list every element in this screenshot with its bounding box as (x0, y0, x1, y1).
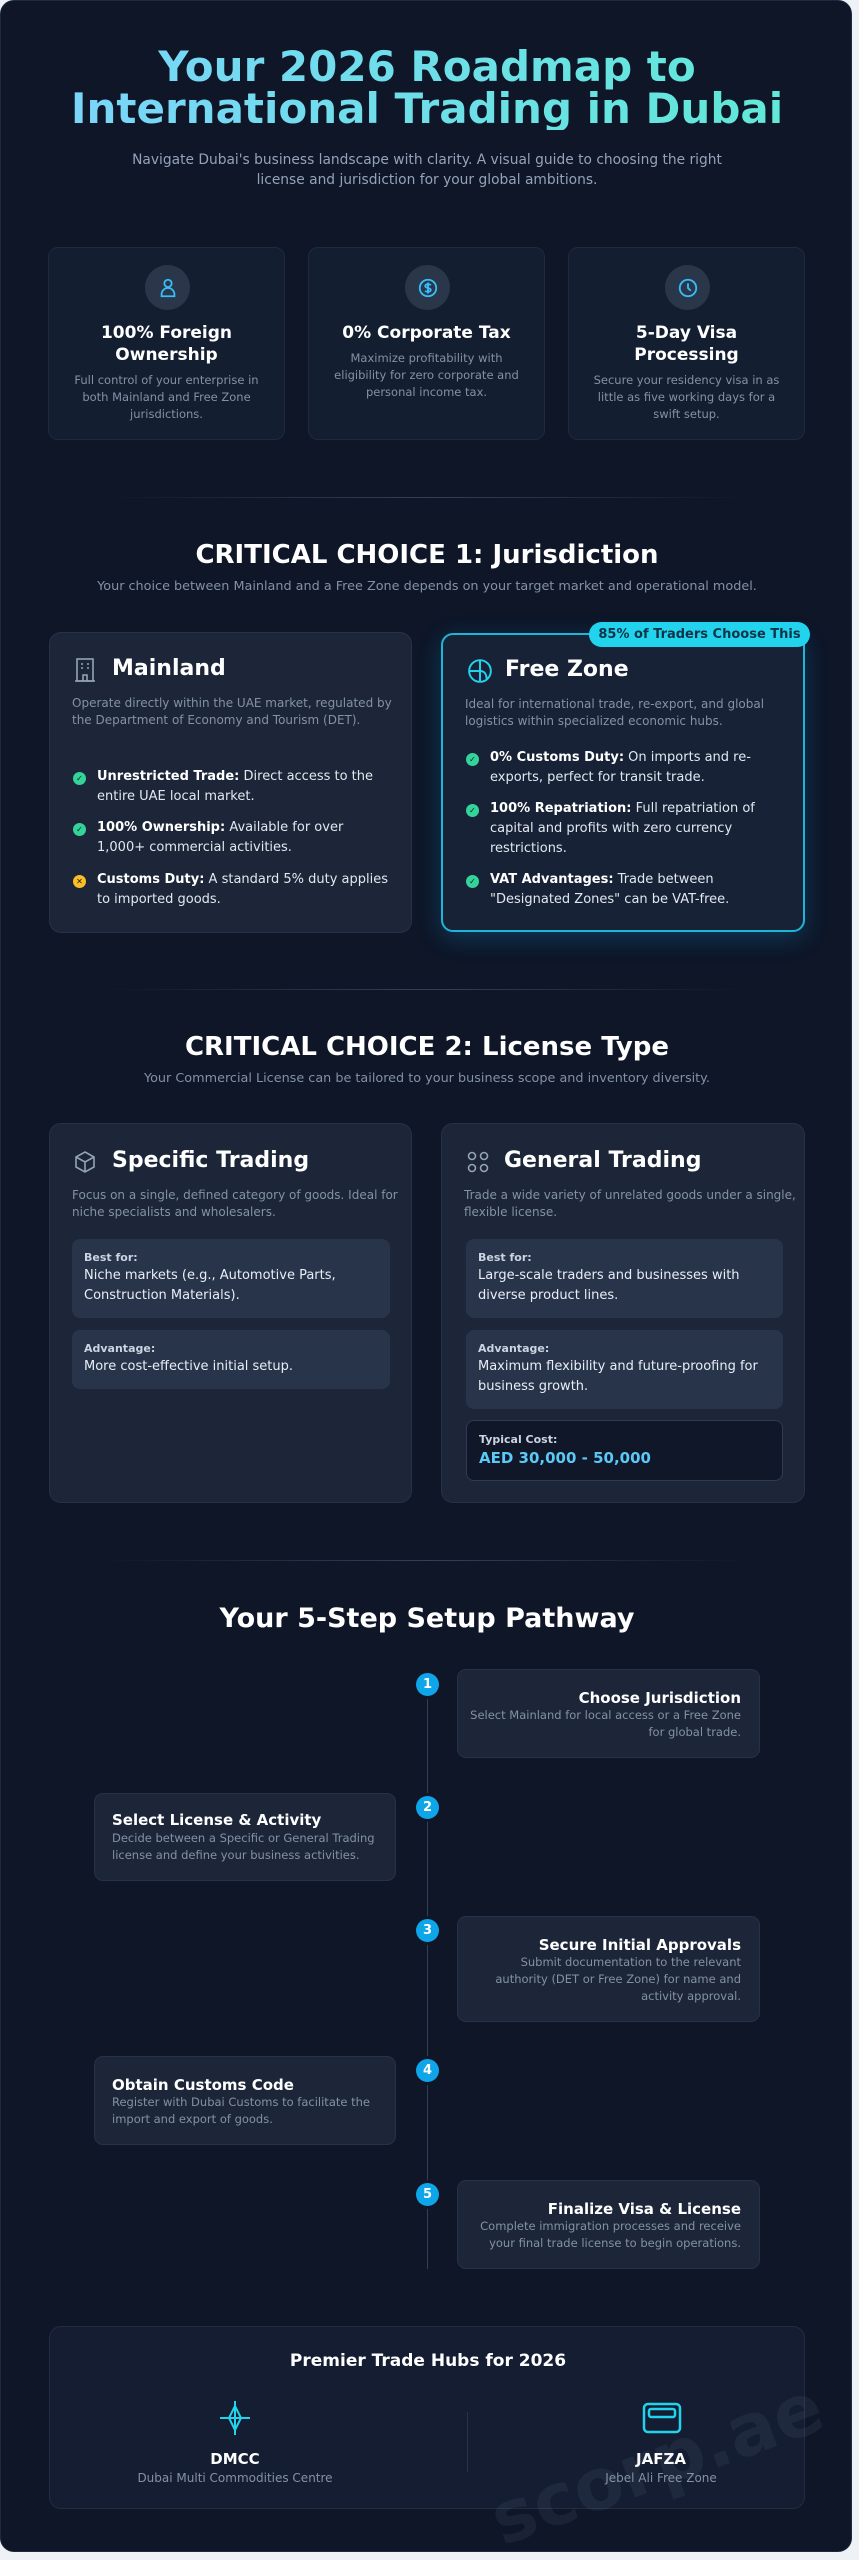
heading: choice 2: CRITICAL CHOICE 2: License Type (185, 1032, 669, 1062)
heading: Premier Trade Hubs for 2026 (290, 2351, 566, 2371)
panel: free zone (441, 633, 805, 932)
hub: DMCC (137, 2401, 333, 2485)
step 2 (94, 1793, 396, 1881)
heading (634, 323, 739, 365)
box: typical cost: AED 30,000 - 50,000 (479, 1449, 651, 1467)
text: Focus on a single, defined category of goods. Ideal for niche specialists and wholesalers. (72, 1188, 398, 1219)
panel: free zone: 0% Customs Duty: On imports and re-exports, perfect for transit trade. (490, 750, 751, 785)
timeline (427, 1699, 428, 2269)
panel: free zone: ✓ (469, 806, 476, 815)
subheading: Your Commercial License can be tailored to your business scope and inventory diversity. (144, 1071, 710, 1086)
icon: building (75, 658, 95, 682)
badge (589, 622, 810, 647)
panel: free zone: ✓ (469, 755, 476, 764)
step 5: Finalize Visa & License (548, 2200, 741, 2218)
panel: mainland (49, 632, 412, 933)
heading: Mainland (112, 656, 226, 681)
list (466, 750, 756, 907)
title: Your 2026 Roadmap to (158, 42, 696, 91)
heading (101, 323, 232, 365)
marker 4 (416, 2059, 439, 2082)
hub: JAFZA (604, 2402, 717, 2485)
panel: specific trading (49, 1123, 412, 1503)
heading: 100% Foreign (101, 323, 232, 343)
panel: free zone: 100% Repatriation: Full repatriation of capital and profits with zero currency restrictions. (490, 801, 755, 856)
heading: 0% Corporate Tax (342, 323, 511, 343)
marker 1: 1 (423, 1677, 432, 1692)
feature card: visa (568, 247, 805, 440)
step 2: Decide between a Specific or General Trading license and define your business activities. (112, 1831, 375, 1862)
list (73, 769, 388, 907)
step 3: Secure Initial Approvals (539, 1936, 741, 1954)
text: Secure your residency visa in as little as five working days for a swift setup. (594, 373, 779, 421)
step 1: Select Mainland for local access or a Free Zone for global trade. (470, 1708, 741, 1739)
heading: 5-Day Visa (636, 323, 737, 343)
marker 5: 5 (423, 2187, 432, 2202)
panel: mainland: ✓ (76, 774, 83, 783)
panel: trade hubs (49, 2326, 805, 2509)
panel: mainland: ✕ (76, 877, 83, 886)
marker 3 (416, 1919, 439, 1942)
heading: pathway: Your 5-Step Setup Pathway (220, 1603, 634, 1634)
step 2: Select License & Activity (112, 1811, 321, 1829)
icon: person (145, 265, 190, 310)
box: advantage: Maximum flexibility and future-proofing for business growth. (478, 1359, 758, 1394)
text: Maximize profitability with eligibility for zero corporate and personal income tax. (334, 351, 519, 399)
hub: JAFZA: Jebel Ali Free Zone (605, 2471, 717, 2485)
marker 4: 4 (423, 2063, 432, 2078)
box: best for: Large-scale traders and businesses with diverse product lines. (478, 1268, 740, 1303)
heading: choice 1: CRITICAL CHOICE 1: Jurisdiction (195, 540, 659, 570)
text: Trade a wide variety of unrelated goods under a single, flexible license. (464, 1188, 796, 1219)
feature card: tax (308, 247, 545, 440)
step 4: Register with Dubai Customs to facilitate the import and export of goods. (112, 2095, 370, 2126)
box: advantage: Advantage: (478, 1342, 549, 1355)
box: typical cost (466, 1420, 783, 1481)
box: advantage: More cost-effective initial setup. (84, 1359, 293, 1374)
panel: free zone: VAT Advantages: Trade between "Designated Zones" can be VAT-free. (490, 872, 729, 907)
step 3: Submit documentation to the relevant authority (DET or Free Zone) for name and activity approval. (495, 1955, 741, 2003)
box: best for (466, 1239, 783, 1318)
box: best for: Best for: (84, 1251, 138, 1264)
box: best for (72, 1239, 390, 1318)
icon: globe (468, 659, 492, 683)
heading: Free Zone (505, 657, 629, 682)
icon: cube (75, 1151, 95, 1173)
heading: Processing (634, 345, 739, 365)
step 5: Complete immigration processes and receive your final trade license to begin operations. (480, 2219, 741, 2250)
box: advantage (466, 1330, 783, 1409)
icon: clock (665, 265, 710, 310)
panel: mainland: Unrestricted Trade: Direct access to the entire UAE local market. (97, 769, 373, 804)
step 1 (457, 1669, 760, 1758)
heading: Ownership (115, 345, 218, 365)
marker 1 (416, 1673, 439, 1696)
box: typical cost: Typical Cost: (479, 1433, 557, 1446)
marker 3: 3 (423, 1923, 432, 1938)
panel: mainland: Customs Duty: A standard 5% duty applies to imported goods. (97, 872, 388, 907)
icon: dollar (405, 265, 450, 310)
step 1: Choose Jurisdiction (579, 1689, 741, 1707)
subtitle: Navigate Dubai's business landscape with clarity. A visual guide to choosing the right license and jurisdiction for your global ambitions. (132, 152, 722, 188)
box: advantage (72, 1330, 390, 1389)
text: Ideal for international trade, re-export, and global logistics within specialized economic hubs. (465, 697, 764, 728)
heading: Specific Trading (112, 1148, 309, 1173)
marker 2: 2 (423, 1800, 432, 1815)
text: Full control of your enterprise in both Mainland and Free Zone jurisdictions. (74, 373, 259, 421)
hub: DMCC: Dubai Multi Commodities Centre (137, 2471, 333, 2485)
step 3 (457, 1916, 760, 2022)
panel: mainland: ✓ (76, 825, 83, 834)
feature card: ownership (48, 247, 285, 440)
step 4: Obtain Customs Code (112, 2076, 294, 2094)
step 4 (94, 2056, 396, 2145)
title: International Trading in Dubai (71, 84, 783, 133)
panel: mainland: 100% Ownership: Available for over 1,000+ commercial activities. (97, 820, 343, 855)
heading: General Trading (504, 1148, 701, 1173)
step 5 (457, 2180, 760, 2269)
box: advantage: Advantage: (84, 1342, 155, 1355)
box: best for: Best for: (478, 1251, 532, 1264)
hub: DMCC: DMCC (210, 2450, 260, 2468)
panel: free zone: ✓ (469, 877, 476, 886)
box: best for: Niche markets (e.g., Automotive Parts, Construction Materials). (84, 1268, 336, 1303)
text: Operate directly within the UAE market, regulated by the Department of Economy and Tourism (DET). (72, 696, 392, 727)
hub: JAFZA: JAFZA (636, 2450, 686, 2468)
marker 2 (416, 1796, 439, 1819)
badge: 85% of Traders Choose This (598, 627, 801, 642)
subheading: Your choice between Mainland and a Free Zone depends on your target market and operational model. (97, 579, 757, 594)
title (1, 46, 853, 130)
icon: grid (468, 1152, 488, 1172)
panel: general trading (441, 1123, 805, 1503)
marker 5 (416, 2183, 439, 2206)
